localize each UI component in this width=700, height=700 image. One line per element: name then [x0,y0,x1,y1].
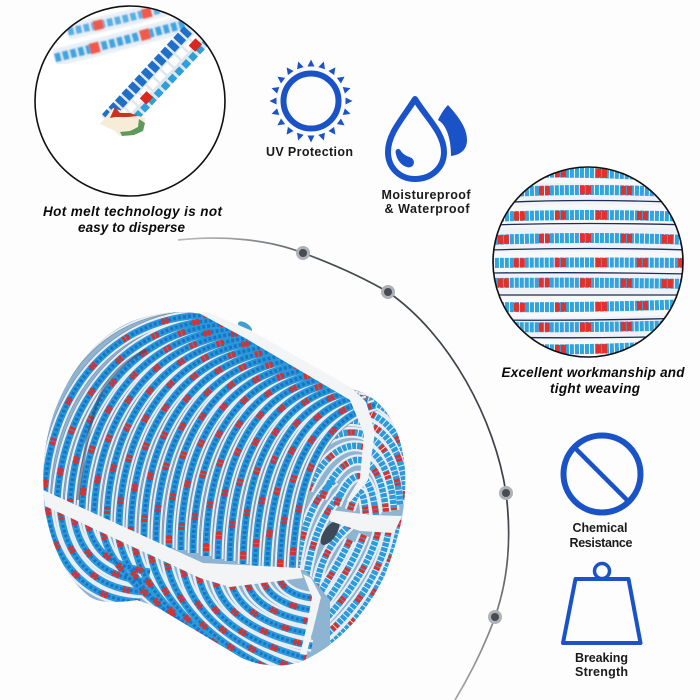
label: Chemical Resistance: Resistance [570,536,633,550]
panel: hot melt rope end detail circle [35,2,225,196]
main wound ropes [43,312,377,568]
caption: hot melt: easy to disperse [78,220,185,235]
coil end face ropes [280,392,406,662]
label: Moistureproof & Waterproof [382,188,471,216]
icon: chemical resistance [564,436,640,512]
rope coil [43,312,406,666]
icon: weight [563,564,640,643]
label: Chemical Resistance [570,521,633,550]
icon: sun UV protection [270,60,352,142]
strap knot [236,319,254,335]
panel: tight weaving detail circle [490,167,690,357]
caption: workmanship: Excellent workmanship and [502,365,685,380]
rope melted end [100,107,145,136]
caption: hot melt [43,204,222,235]
label: Moistureproof & Waterproof: & Waterproof [384,202,470,216]
background blurred rope [55,2,200,58]
lower ropes below band [44,498,330,666]
label: UV Protection: UV Protection [266,145,353,159]
label: Moistureproof & Waterproof: Moistureproof [382,188,471,202]
arc connector with dots [178,238,513,700]
icon: water drops [388,99,467,179]
white straps [43,312,402,655]
caption: workmanship [502,365,685,396]
caption: hot melt: Hot melt technology is not [43,204,222,219]
woven rows [490,173,690,349]
label: Breaking Strength: Strength [575,665,628,679]
main rope [106,30,206,132]
caption: workmanship: tight weaving [550,381,641,396]
label: Chemical Resistance: Chemical [572,521,628,535]
label: Breaking Strength [575,651,628,679]
label: Breaking Strength: Breaking [575,651,628,665]
